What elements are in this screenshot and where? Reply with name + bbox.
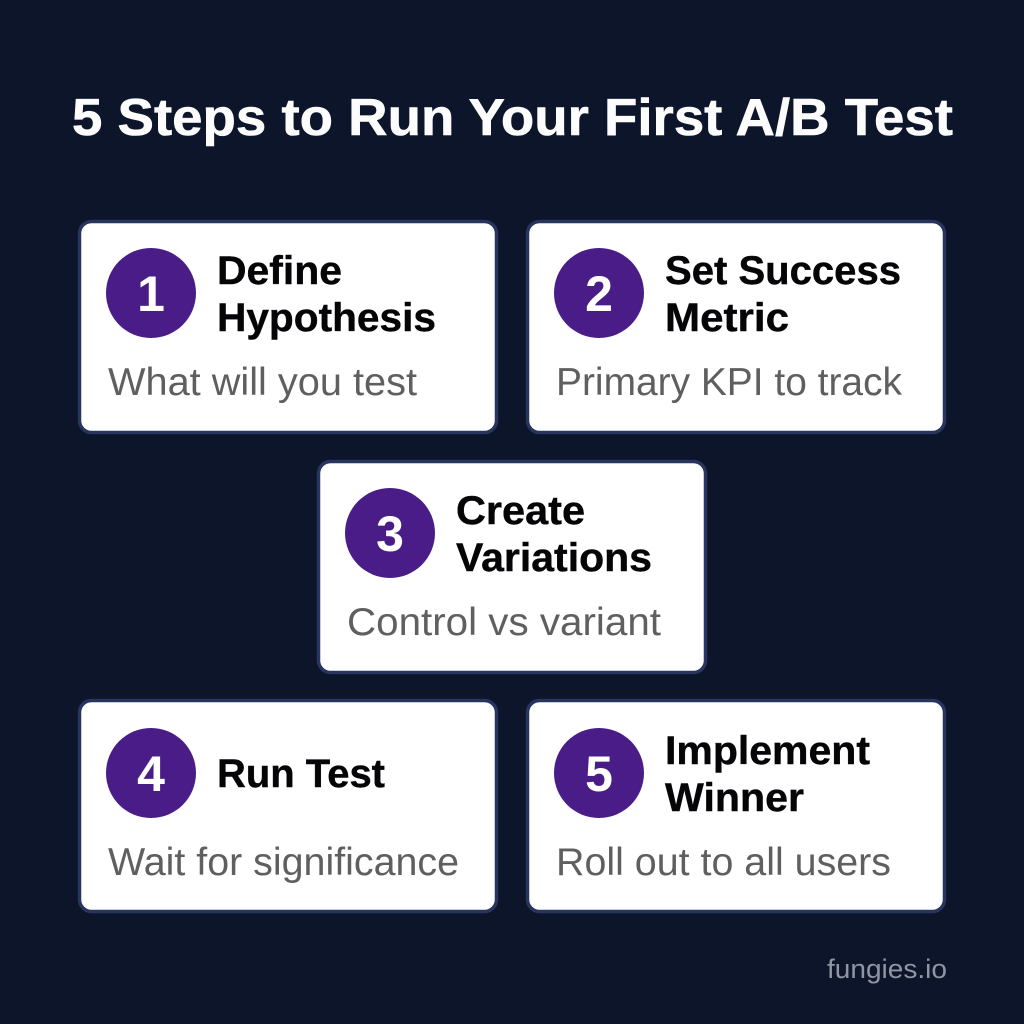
heading: create variations: Create [456, 489, 585, 533]
panel: step 2 set success metric [528, 222, 944, 432]
description: step 2: Primary KPI to track [556, 361, 903, 404]
icon: number 2 badge [554, 248, 644, 338]
heading: create variations: Variations [456, 536, 652, 580]
heading: define hypothesis: Hypothesis [217, 296, 436, 340]
icon: number 5 badge: 5 [585, 746, 613, 802]
icon: number 2 badge: 2 [585, 266, 613, 322]
panel: step 5 implement winner [528, 700, 944, 912]
heading: set success metric: Metric [665, 296, 789, 340]
icon: number 4 badge: 4 [137, 746, 165, 802]
icon: number 4 badge [106, 728, 196, 818]
icon: number 3 badge: 3 [376, 506, 404, 562]
heading: implement winner: Implement [665, 729, 870, 773]
description: step 4: Wait for significance [108, 841, 459, 884]
icon: number 1 badge: 1 [137, 266, 165, 322]
heading: define hypothesis: Define [217, 249, 342, 293]
description: step 3: Control vs variant [347, 601, 661, 644]
icon: number 1 badge [106, 248, 196, 338]
panel: step 1 define hypothesis [80, 222, 496, 432]
brand footer: fungies.io [827, 954, 947, 984]
icon: number 3 badge [345, 488, 435, 578]
description: step 5: Roll out to all users [556, 841, 891, 884]
description: step 1: What will you test [108, 361, 417, 404]
icon: number 5 badge [554, 728, 644, 818]
panel: step 4 run test [80, 700, 496, 912]
title: 5 Steps to Run Your First A/B Test [72, 89, 953, 147]
heading: set success metric: Set Success [665, 249, 901, 293]
heading: implement winner: Winner [665, 776, 804, 820]
heading: run test: Run Test [217, 752, 385, 796]
panel: step 3 create variations [318, 462, 706, 672]
